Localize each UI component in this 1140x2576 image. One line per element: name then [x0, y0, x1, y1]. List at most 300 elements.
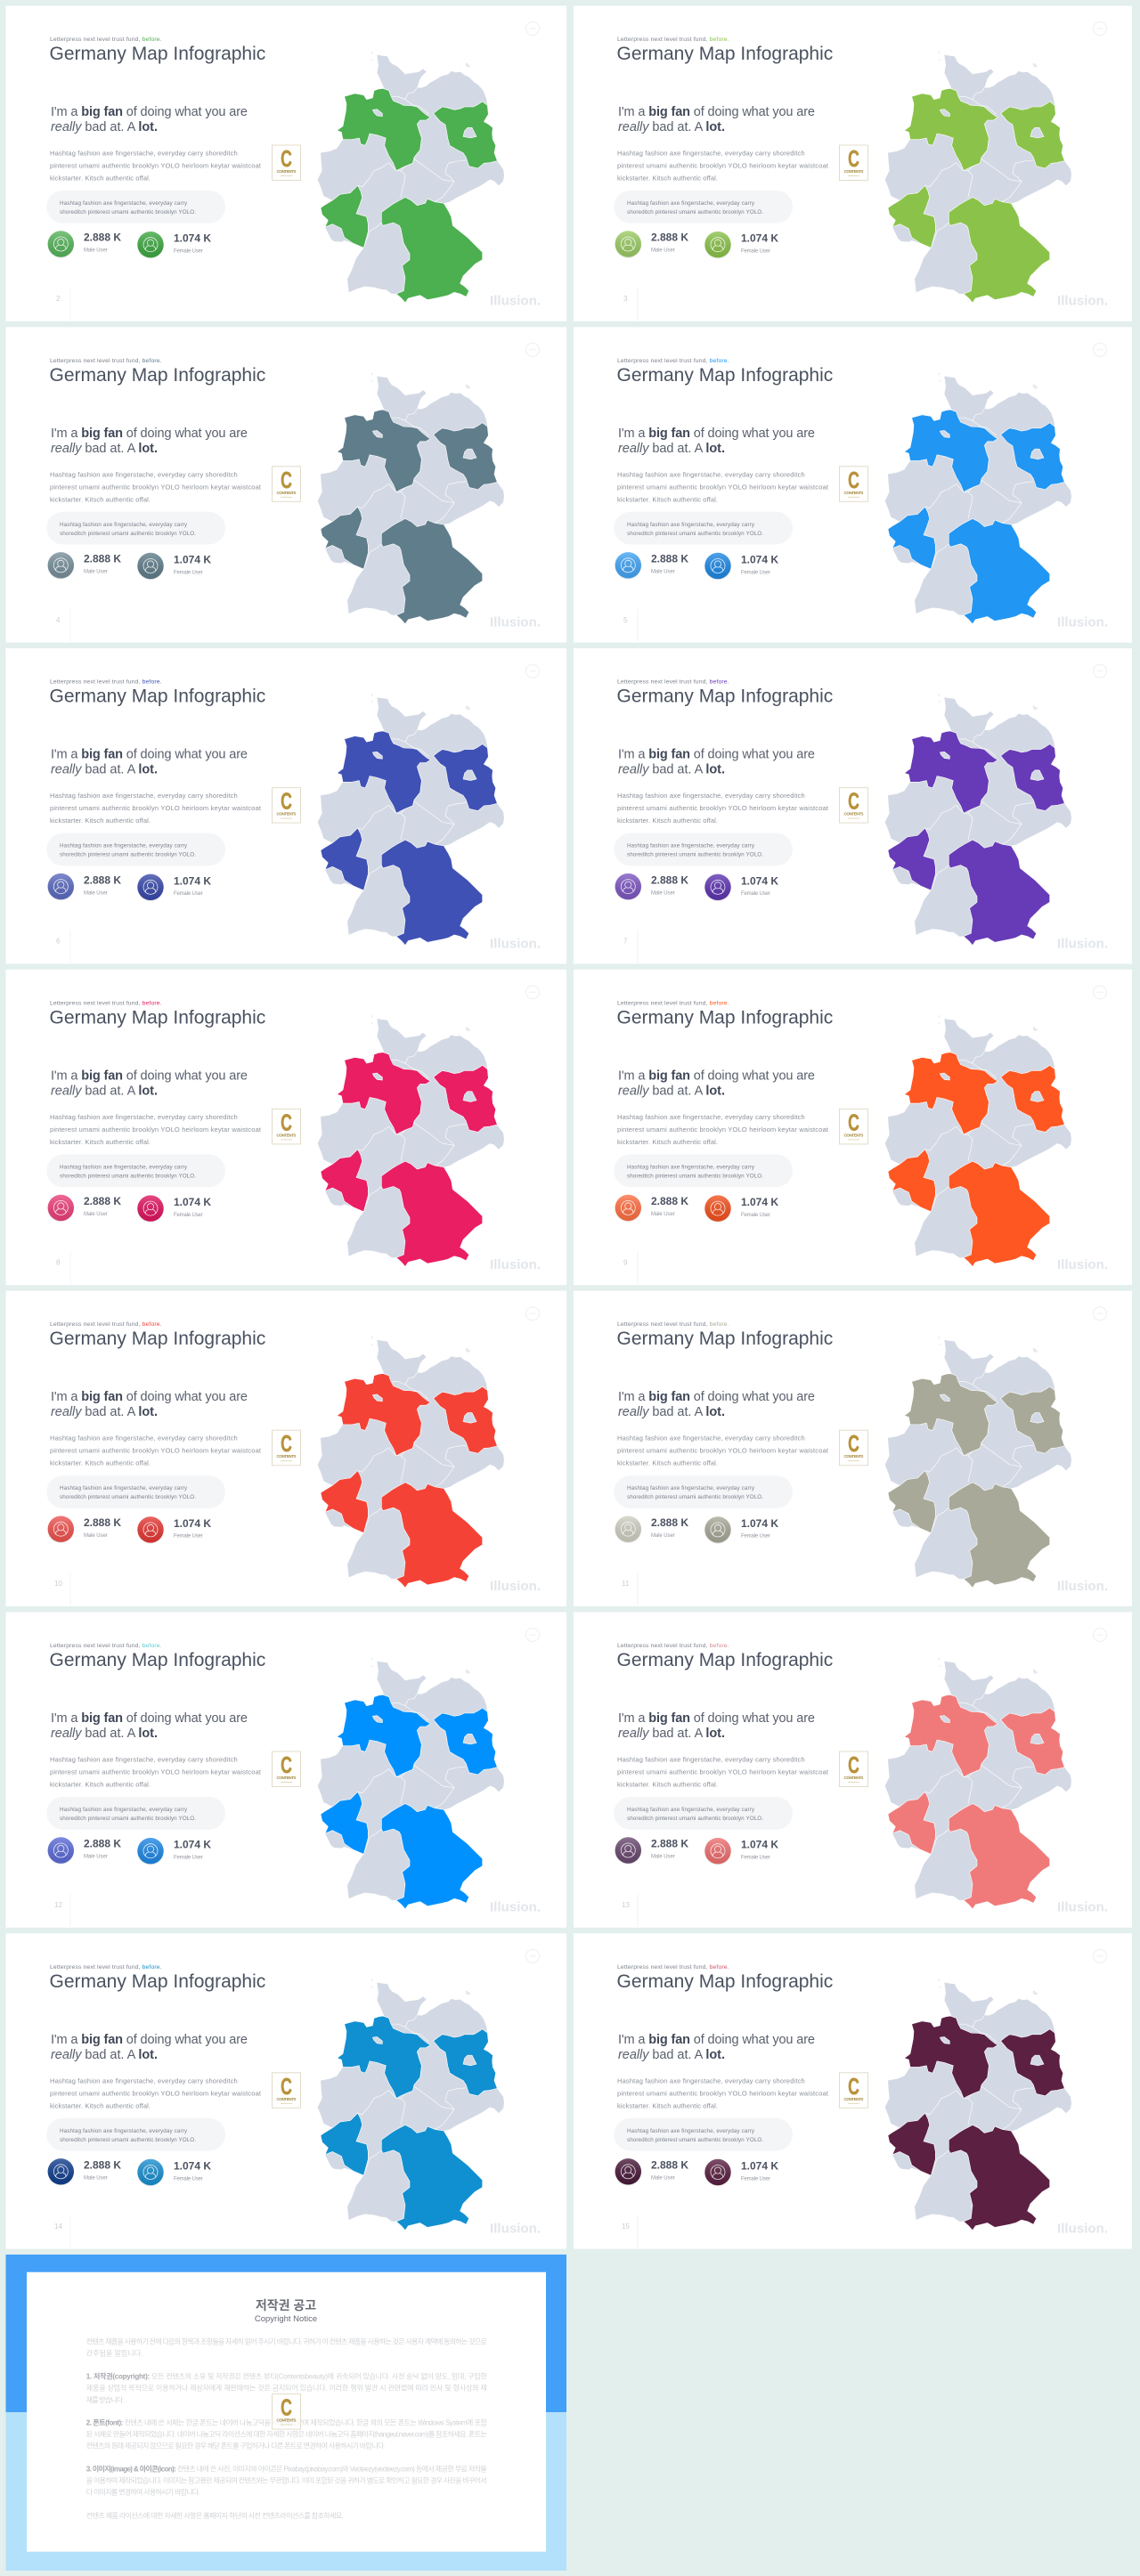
- brand wordmark: Illusion.: [490, 294, 541, 309]
- logo badge: CONTENTS: [276, 1776, 296, 1780]
- icon: menu circle: [525, 21, 540, 36]
- stat: male users: 2.888 K: [84, 1195, 121, 1207]
- map of Germany: [885, 1658, 1071, 1909]
- panel: slide 5: [574, 327, 1132, 643]
- eyebrow text: Letterpress next level trust fund, before.: [617, 1643, 729, 1649]
- panel: slide 6: [5, 648, 566, 963]
- stat: female users: 1.074 K: [741, 554, 778, 566]
- callout pill: [46, 833, 225, 865]
- logo badge: CONTENTS: [844, 1776, 864, 1780]
- logo badge: [273, 2073, 301, 2108]
- logo badge: C: [281, 1431, 292, 1457]
- panel: slide 13: [574, 1612, 1132, 1928]
- notice clause 3: 다 이미지를 변경하여 사용하시기 바랍니다.: [86, 2488, 200, 2497]
- stat: female users: [174, 874, 211, 897]
- page number: [54, 2215, 70, 2248]
- logo badge: CONTENTS: [844, 1454, 864, 1459]
- body text: kickstarter. Kitsch authentic offal.: [50, 817, 151, 825]
- map of Germany: [318, 372, 504, 624]
- page number: [56, 930, 70, 963]
- heading: really bad at. A lot.: [618, 1084, 725, 1098]
- stat: female users: 1.074 K: [741, 232, 778, 245]
- title: Germany Map Infographic: [616, 1329, 833, 1349]
- stat: female users: 1.074 K: [174, 232, 211, 245]
- brand wordmark: Illusion.: [490, 2222, 541, 2237]
- stat: female users: 1.074 K: [174, 1839, 211, 1851]
- callout pill: [614, 1475, 793, 1508]
- eyebrow text: Letterpress next level trust fund, before.: [617, 358, 729, 364]
- page number: [622, 2215, 638, 2248]
- page number: [56, 609, 70, 642]
- eyebrow text: Letterpress next level trust fund, before.: [50, 1321, 162, 1328]
- heading: really bad at. A lot.: [618, 120, 725, 134]
- icon: male user: [48, 552, 74, 579]
- body text: kickstarter. Kitsch authentic offal.: [617, 1459, 718, 1467]
- callout pill: [614, 191, 793, 223]
- logo badge: CONTENTS: [844, 491, 864, 495]
- logo badge: C: [281, 467, 292, 493]
- body text: Hashtag fashion axe fingerstache, everyday carry shoreditch: [617, 1756, 805, 1763]
- icon: male user: [615, 874, 641, 900]
- stat: male users: Male User: [84, 890, 108, 896]
- page number: [623, 288, 638, 321]
- callout pill: Hashtag fashion axe fingerstache, everyday carry: [627, 1807, 755, 1813]
- notice subtitle: Copyright Notice: [255, 2314, 317, 2324]
- eyebrow text: Letterpress next level trust fund, before.: [617, 37, 729, 43]
- map of Germany: [885, 1015, 1071, 1266]
- callout pill: Hashtag fashion axe fingerstache, everyday carry: [60, 522, 188, 528]
- stat: male users: Male User: [84, 1533, 108, 1539]
- body text: pinterest umami authentic brooklyn YOLO heirloom keytar waistcoat: [50, 804, 262, 812]
- heading: I'm a big fan of doing what you are: [51, 1711, 248, 1726]
- stat: female users: [741, 232, 778, 255]
- callout pill: Hashtag fashion axe fingerstache, everyday carry: [60, 843, 188, 849]
- logo badge: [839, 1430, 867, 1466]
- body text: Hashtag fashion axe fingerstache, everyday carry shoreditch: [50, 2076, 238, 2084]
- body text: pinterest umami authentic brooklyn YOLO heirloom keytar waistcoat: [617, 1768, 829, 1776]
- notice clause 1: 재를 받습니다.: [86, 2395, 125, 2404]
- logo badge: C: [281, 2394, 292, 2420]
- heading: really bad at. A lot.: [51, 2048, 158, 2062]
- eyebrow text: Letterpress next level trust fund, before.: [617, 1321, 729, 1328]
- callout pill: shoreditch pinterest umami authentic brooklyn YOLO.: [60, 531, 196, 537]
- stat: female users: 1.074 K: [741, 874, 778, 887]
- brand wordmark: Illusion.: [490, 1257, 541, 1272]
- stat: male users: Male User: [651, 890, 675, 896]
- callout pill: shoreditch pinterest umami authentic brooklyn YOLO.: [627, 1173, 763, 1179]
- callout pill: shoreditch pinterest umami authentic brooklyn YOLO.: [60, 209, 196, 215]
- logo badge: C: [281, 1109, 292, 1135]
- brand wordmark: Illusion.: [490, 936, 541, 951]
- callout pill: [46, 1797, 225, 1830]
- body text: pinterest umami authentic brooklyn YOLO heirloom keytar waistcoat: [50, 1768, 262, 1776]
- heading: I'm a big fan of doing what you are: [618, 1069, 815, 1083]
- stat: female users: Female User: [174, 1213, 203, 1218]
- icon: menu circle: [525, 343, 540, 356]
- stat: female users: Female User: [174, 891, 203, 897]
- eyebrow text: Letterpress next level trust fund, before.: [617, 1000, 729, 1006]
- brand wordmark: Illusion.: [1057, 1579, 1108, 1594]
- icon: menu circle: [1094, 986, 1106, 999]
- stat: male users: 2.888 K: [651, 2159, 688, 2172]
- logo badge: C: [281, 146, 292, 172]
- page number: [56, 1251, 70, 1284]
- icon: male user: [48, 874, 74, 900]
- page number: [623, 609, 638, 642]
- icon: female user: [137, 874, 164, 901]
- stat: female users: Female User: [741, 1856, 770, 1861]
- icon: male user: [615, 1195, 641, 1222]
- panel: slide 9: [574, 970, 1132, 1285]
- icon: male user: [615, 231, 641, 258]
- panel: slide 4: [5, 327, 566, 643]
- body text: pinterest umami authentic brooklyn YOLO heirloom keytar waistcoat: [617, 162, 829, 169]
- stat: female users: 1.074 K: [174, 1517, 211, 1530]
- brand wordmark: Illusion.: [1057, 2222, 1108, 2237]
- body text: Hashtag fashion axe fingerstache, everyday carry shoreditch: [50, 1756, 238, 1763]
- callout pill: Hashtag fashion axe fingerstache, everyday carry: [60, 1164, 188, 1170]
- page number: 3: [623, 295, 628, 303]
- title: Germany Map Infographic: [616, 365, 833, 386]
- logo badge: C: [848, 1431, 859, 1457]
- stat: female users: 1.074 K: [174, 2160, 211, 2173]
- title: Germany Map Infographic: [50, 44, 265, 64]
- body text: kickstarter. Kitsch authentic offal.: [50, 495, 151, 503]
- panel: slide 7: [574, 648, 1132, 963]
- body text: Hashtag fashion axe fingerstache, everyday carry shoreditch: [617, 1113, 805, 1121]
- stat: male users: 2.888 K: [84, 874, 121, 886]
- body text: Hashtag fashion axe fingerstache, everyday carry shoreditch: [617, 150, 805, 157]
- logo badge: [839, 2073, 867, 2108]
- panel: slide 2: [5, 5, 566, 321]
- notice title: 저작권 공고: [256, 2298, 316, 2312]
- stat: female users: 1.074 K: [741, 2160, 778, 2173]
- map of Germany: [885, 52, 1071, 303]
- map of Germany: [885, 1979, 1071, 2231]
- heading: I'm a big fan of doing what you are: [618, 2033, 815, 2047]
- stat: female users: 1.074 K: [174, 554, 211, 566]
- stat: male users: 2.888 K: [651, 552, 688, 565]
- logo badge: [273, 2394, 301, 2429]
- notice intro: 컨텐츠 제품을 사용하기 전에 다음의 항목과 조항들을 자세히 읽어 주시기 바랍니다. 귀하가 이 컨텐츠 제품을 사용하는 것은 사용자 계약에 동의하는 것으로: [86, 2336, 487, 2345]
- stat: male users: Male User: [651, 1533, 675, 1539]
- heading: I'm a big fan of doing what you are: [618, 1711, 815, 1726]
- logo badge: [839, 1109, 867, 1144]
- page number: 14: [54, 2223, 62, 2231]
- notice clause 2: 컨텐츠의 원래 제공되지 않으므로 필요한 경우 해당 폰트를 구입하거나 다른 폰트로 변경하여 사용하시기 바랍니다.: [86, 2442, 386, 2450]
- title: Germany Map Infographic: [50, 365, 265, 386]
- heading: really bad at. A lot.: [51, 1084, 158, 1098]
- title: Germany Map Infographic: [616, 687, 833, 707]
- panel: slide 3: [574, 5, 1132, 321]
- logo badge: C: [281, 788, 292, 814]
- panel: slide 15: [574, 1933, 1132, 2249]
- logo badge: C: [848, 467, 859, 493]
- page number: 11: [622, 1580, 630, 1588]
- heading: really bad at. A lot.: [51, 1727, 158, 1741]
- stat: male users: 2.888 K: [651, 1838, 688, 1850]
- stat: female users: 1.074 K: [174, 1196, 211, 1208]
- icon: female user: [704, 1838, 731, 1865]
- stat: female users: [174, 232, 211, 255]
- stat: female users: [174, 554, 211, 575]
- callout pill: [46, 2118, 225, 2151]
- logo badge: [273, 467, 301, 501]
- notice clause 3: 3. 이미지(image) & 아이콘(icon): 컨텐츠 내에 쓴 사진, 이미지와 아이콘은 Pixabay(pixabay.com)와 Vecteezy(vecteezy.com) 등에서 제공한 무료 저작물: [86, 2466, 487, 2474]
- logo badge: C: [281, 2073, 292, 2100]
- logo badge: CONTENTS: [276, 812, 296, 817]
- callout pill: [614, 1797, 793, 1830]
- brand wordmark: Illusion.: [1057, 1900, 1108, 1915]
- stat: male users: 2.888 K: [84, 552, 121, 565]
- body text: kickstarter. Kitsch authentic offal.: [50, 1781, 151, 1788]
- stat: female users: Female User: [741, 1213, 770, 1218]
- stat: female users: [741, 1517, 778, 1540]
- icon: male user: [615, 2158, 641, 2185]
- callout pill: shoreditch pinterest umami authentic brooklyn YOLO.: [60, 1494, 196, 1500]
- page number: [622, 1894, 638, 1927]
- callout pill: Hashtag fashion axe fingerstache, everyday carry: [60, 1485, 188, 1491]
- logo badge: [273, 145, 301, 180]
- logo badge: C: [848, 1109, 859, 1135]
- body text: pinterest umami authentic brooklyn YOLO heirloom keytar waistcoat: [617, 1125, 829, 1134]
- stat: male users: [84, 1516, 121, 1539]
- icon: female user: [704, 1516, 731, 1544]
- heading: I'm a big fan of doing what you are: [51, 1390, 248, 1404]
- logo badge: [273, 788, 301, 823]
- stat: female users: [741, 874, 778, 897]
- callout pill: [614, 2118, 793, 2151]
- body text: pinterest umami authentic brooklyn YOLO heirloom keytar waistcoat: [50, 2089, 262, 2097]
- stat: female users: 1.074 K: [741, 1839, 778, 1851]
- body text: Hashtag fashion axe fingerstache, everyday carry shoreditch: [617, 1434, 805, 1442]
- panel: copyright notice: [5, 2255, 566, 2571]
- stat: female users: 1.074 K: [741, 1196, 778, 1208]
- notice clause 2: 2. 폰트(font): 컨텐츠 내에 쓴 서체는 한글 폰트는 네이버 나눔고딕을 사용하였으며 제작되었습니다. 한글 외의 모든 폰트는 Windows System에 포함: [86, 2419, 487, 2427]
- icon: male user: [48, 1837, 74, 1865]
- eyebrow text: Letterpress next level trust fund, before.: [50, 1643, 162, 1649]
- brand wordmark: Illusion.: [490, 614, 541, 630]
- stat: male users: Male User: [651, 1212, 675, 1217]
- stat: male users: 2.888 K: [84, 1838, 121, 1850]
- icon: male user: [48, 1516, 74, 1543]
- stat: male users: 2.888 K: [651, 232, 688, 244]
- callout pill: Hashtag fashion axe fingerstache, everyday carry: [627, 200, 755, 207]
- callout pill: [46, 1154, 225, 1187]
- brand wordmark: Illusion.: [490, 1900, 541, 1915]
- stat: male users: [651, 2158, 688, 2182]
- callout pill: Hashtag fashion axe fingerstache, everyday carry: [627, 522, 755, 528]
- stat: female users: Female User: [741, 1534, 770, 1540]
- icon: male user: [48, 2158, 74, 2185]
- stat: male users: [84, 2158, 121, 2182]
- body text: kickstarter. Kitsch authentic offal.: [617, 495, 718, 503]
- heading: I'm a big fan of doing what you are: [618, 748, 815, 762]
- stat: male users: 2.888 K: [84, 2159, 121, 2172]
- map of Germany: [885, 1337, 1071, 1588]
- heading: really bad at. A lot.: [618, 763, 725, 777]
- stat: female users: 1.074 K: [174, 874, 211, 887]
- heading: I'm a big fan of doing what you are: [618, 1390, 815, 1404]
- logo badge: C: [848, 146, 859, 172]
- heading: really bad at. A lot.: [51, 1405, 158, 1419]
- body text: kickstarter. Kitsch authentic offal.: [617, 175, 718, 182]
- stat: male users: 2.888 K: [651, 1195, 688, 1207]
- heading: really bad at. A lot.: [51, 442, 158, 456]
- page number: 6: [56, 938, 61, 946]
- icon: male user: [615, 1516, 641, 1543]
- title: Germany Map Infographic: [616, 1971, 833, 1992]
- heading: I'm a big fan of doing what you are: [51, 427, 248, 441]
- callout pill: shoreditch pinterest umami authentic brooklyn YOLO.: [627, 531, 763, 537]
- body text: Hashtag fashion axe fingerstache, everyday carry shoreditch: [50, 1113, 238, 1121]
- stat: female users: [741, 1196, 778, 1218]
- callout pill: [46, 1475, 225, 1508]
- stat: male users: 2.888 K: [651, 874, 688, 886]
- callout pill: [614, 1154, 793, 1187]
- page number: 8: [56, 1258, 61, 1266]
- heading: I'm a big fan of doing what you are: [618, 105, 815, 119]
- stat: female users: [741, 1839, 778, 1861]
- callout pill: Hashtag fashion axe fingerstache, everyday carry: [627, 1485, 755, 1491]
- eyebrow text: Letterpress next level trust fund, before.: [50, 679, 162, 686]
- body text: Hashtag fashion axe fingerstache, everyday carry shoreditch: [50, 1434, 238, 1442]
- heading: I'm a big fan of doing what you are: [51, 2033, 248, 2047]
- page number: 5: [623, 616, 628, 624]
- icon: female user: [137, 232, 164, 258]
- stat: female users: Female User: [174, 1856, 203, 1861]
- icon: menu circle: [525, 1307, 540, 1321]
- title: Germany Map Infographic: [50, 1650, 265, 1670]
- stat: female users: Female User: [174, 1534, 203, 1540]
- callout pill: shoreditch pinterest umami authentic brooklyn YOLO.: [627, 209, 763, 215]
- stat: female users: Female User: [741, 249, 770, 255]
- eyebrow text: Letterpress next level trust fund, before.: [50, 37, 162, 43]
- stat: male users: 2.888 K: [651, 1516, 688, 1529]
- stat: male users: [84, 552, 121, 575]
- page number: 4: [56, 616, 61, 624]
- panel: slide 10: [5, 1291, 566, 1606]
- body text: pinterest umami authentic brooklyn YOLO heirloom keytar waistcoat: [617, 2089, 829, 2097]
- icon: menu circle: [1094, 1628, 1106, 1642]
- body text: kickstarter. Kitsch authentic offal.: [50, 1459, 151, 1467]
- callout pill: shoreditch pinterest umami authentic brooklyn YOLO.: [627, 1494, 763, 1500]
- stat: male users: [84, 1838, 121, 1860]
- body text: pinterest umami authentic brooklyn YOLO heirloom keytar waistcoat: [617, 1447, 829, 1455]
- callout pill: [46, 512, 225, 545]
- stat: female users: Female User: [174, 570, 203, 575]
- callout pill: Hashtag fashion axe fingerstache, everyday carry: [60, 2128, 188, 2134]
- logo badge: CONTENTS: [276, 2097, 296, 2101]
- title: Germany Map Infographic: [616, 1650, 833, 1670]
- notice clause 3: 을 이용하여 제작되었습니다. 이미지는 참고용만 제공되며 컨텐츠와는 무관합니다. 이미 포함된 것을 귀하가 별도로 확인하고 필요한 경우 사진을 바꾸어서: [86, 2476, 487, 2485]
- eyebrow text: Letterpress next level trust fund, before.: [50, 358, 162, 364]
- callout pill: [614, 833, 793, 865]
- notice clause 1: 1. 저작권(copyright): 모든 컨텐츠의 소유 및 저작권은 컨텐츠 뷰티(Contentsbeauty)에 귀속되어 있습니다. 사전 승낙 없이 양도, 임대, 구입한: [86, 2372, 487, 2380]
- page number: [623, 930, 638, 963]
- icon: menu circle: [1094, 343, 1106, 356]
- stat: male users: Male User: [84, 1855, 108, 1860]
- icon: female user: [704, 874, 731, 901]
- title: Germany Map Infographic: [616, 44, 833, 64]
- icon: menu circle: [1094, 664, 1106, 678]
- callout pill: shoreditch pinterest umami authentic brooklyn YOLO.: [627, 1816, 763, 1822]
- icon: female user: [704, 553, 731, 580]
- map of Germany: [318, 1658, 504, 1909]
- logo badge: [273, 1109, 301, 1144]
- callout pill: shoreditch pinterest umami authentic brooklyn YOLO.: [627, 2137, 763, 2143]
- logo badge: C: [848, 788, 859, 814]
- body text: pinterest umami authentic brooklyn YOLO heirloom keytar waistcoat: [50, 483, 262, 491]
- stat: male users: Male User: [84, 1212, 108, 1217]
- icon: male user: [615, 1837, 641, 1865]
- icon: female user: [137, 553, 164, 580]
- brand wordmark: Illusion.: [1057, 614, 1108, 630]
- stat: male users: 2.888 K: [84, 1516, 121, 1529]
- map of Germany: [318, 1015, 504, 1266]
- logo badge: [839, 467, 867, 501]
- stat: male users: Male User: [84, 2176, 108, 2182]
- page number: 2: [56, 295, 61, 303]
- notice footer: 컨텐츠 제품 라이선스에 대한 자세한 사항은 홈페이지 하단의 사전 컨텐츠라이선스를 참조하세요.: [86, 2511, 344, 2520]
- logo badge: [273, 1751, 301, 1786]
- logo badge: CONTENTS: [276, 1133, 296, 1137]
- heading: I'm a big fan of doing what you are: [51, 105, 248, 119]
- body text: kickstarter. Kitsch authentic offal.: [617, 817, 718, 825]
- logo badge: CONTENTS: [844, 812, 864, 817]
- brand wordmark: Illusion.: [1057, 294, 1108, 309]
- page number: 15: [622, 2223, 630, 2231]
- body text: Hashtag fashion axe fingerstache, everyday carry shoreditch: [617, 2076, 805, 2084]
- brand wordmark: Illusion.: [1057, 936, 1108, 951]
- body text: kickstarter. Kitsch authentic offal.: [50, 175, 151, 182]
- map of Germany: [318, 1337, 504, 1588]
- icon: female user: [137, 1516, 164, 1544]
- icon: male user: [48, 1195, 74, 1222]
- map of Germany: [885, 372, 1071, 624]
- logo badge: C: [848, 2073, 859, 2100]
- stat: female users: [174, 1196, 211, 1218]
- page number: 7: [623, 938, 628, 946]
- icon: menu circle: [1094, 21, 1106, 36]
- body text: kickstarter. Kitsch authentic offal.: [617, 1781, 718, 1788]
- stat: female users: Female User: [741, 570, 770, 575]
- logo badge: CONTENTS: [276, 491, 296, 495]
- body text: kickstarter. Kitsch authentic offal.: [50, 1138, 151, 1146]
- callout pill: [46, 191, 225, 223]
- stat: male users: Male User: [84, 570, 108, 575]
- title: Germany Map Infographic: [616, 1007, 833, 1028]
- callout pill: shoreditch pinterest umami authentic brooklyn YOLO.: [60, 2137, 196, 2143]
- stat: female users: [174, 1839, 211, 1861]
- stat: female users: [741, 554, 778, 575]
- panel: slide 11: [574, 1291, 1132, 1606]
- callout pill: [614, 512, 793, 545]
- map of Germany: [318, 52, 504, 303]
- logo badge: CONTENTS: [276, 1454, 296, 1459]
- stat: male users: [651, 232, 688, 254]
- panel: slide 12: [5, 1612, 566, 1928]
- heading: I'm a big fan of doing what you are: [51, 1069, 248, 1083]
- body text: Hashtag fashion axe fingerstache, everyday carry shoreditch: [50, 150, 238, 157]
- heading: really bad at. A lot.: [618, 1405, 725, 1419]
- stat: male users: [651, 1195, 688, 1217]
- body text: Hashtag fashion axe fingerstache, everyday carry shoreditch: [617, 470, 805, 478]
- stat: male users: 2.888 K: [84, 232, 121, 244]
- icon: female user: [704, 232, 731, 258]
- heading: really bad at. A lot.: [618, 2048, 725, 2062]
- callout pill: shoreditch pinterest umami authentic brooklyn YOLO.: [60, 1173, 196, 1179]
